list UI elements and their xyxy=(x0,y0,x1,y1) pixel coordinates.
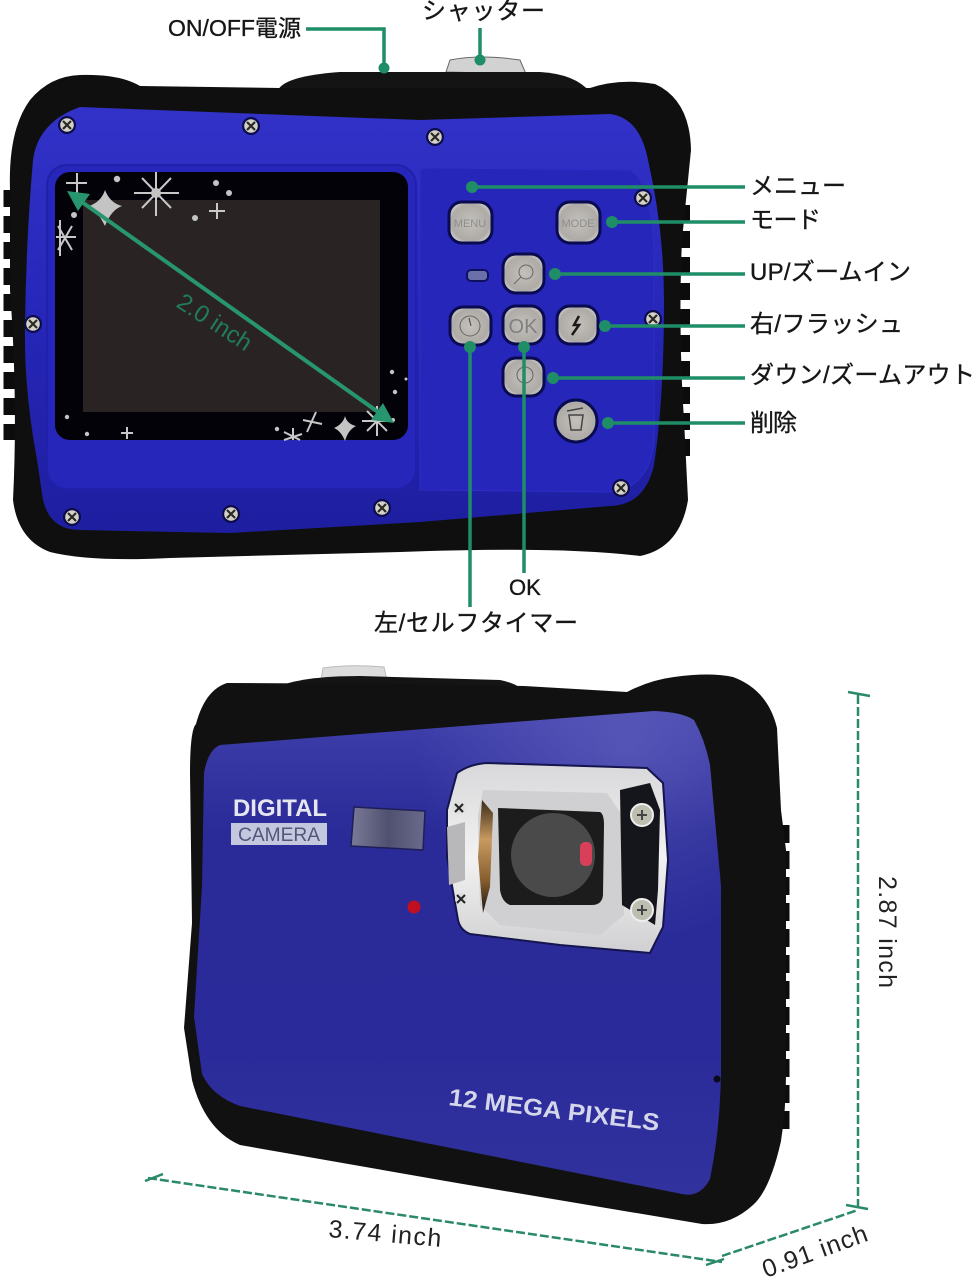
callout: shutter xyxy=(474,28,486,66)
button: mode xyxy=(557,202,600,243)
side port xyxy=(714,1076,720,1082)
indicator light xyxy=(467,270,488,281)
grip ridges xyxy=(4,190,16,440)
control panel inset xyxy=(420,168,654,492)
gold reflection xyxy=(478,800,493,913)
top hump xyxy=(275,676,526,694)
body xyxy=(10,75,691,559)
callout: menu xyxy=(466,181,745,193)
body xyxy=(184,674,786,1224)
label: delete: 削除 xyxy=(750,410,797,437)
callout: up xyxy=(549,268,745,280)
digital camera logo: CAMERA xyxy=(238,825,320,846)
label: left self timer: 左/セルフタイマー xyxy=(374,610,578,637)
dimension: width xyxy=(145,1174,724,1265)
lens reflection xyxy=(580,842,592,866)
screen surround xyxy=(47,165,416,489)
digital camera logo: DIGITAL xyxy=(233,795,327,822)
buttons xyxy=(449,202,600,442)
screen xyxy=(55,172,408,440)
lens window xyxy=(498,808,604,905)
camera: front view xyxy=(10,57,691,559)
housing screws xyxy=(631,804,653,826)
top hump xyxy=(278,72,590,92)
button: ok xyxy=(503,306,544,344)
callout: down xyxy=(547,372,745,384)
button: menu: MENU xyxy=(454,218,486,230)
callout: ok xyxy=(518,341,530,573)
blue body xyxy=(194,711,721,1195)
dimension: width: 3.74 inch xyxy=(327,1215,442,1253)
label: menu: メニュー xyxy=(750,173,846,200)
callout: delete xyxy=(602,417,745,429)
12 mega pixels text: 12 MEGA PIXELS xyxy=(447,1084,661,1137)
button: mode: MODE xyxy=(562,218,594,230)
left tab xyxy=(447,822,465,885)
right ridges xyxy=(782,825,790,1130)
label: mode: モード xyxy=(750,207,821,234)
button: ok: OK xyxy=(509,316,538,338)
size arrow: 2.0 inch screen xyxy=(67,191,394,423)
button: down xyxy=(503,358,544,396)
screen display xyxy=(83,200,380,412)
digital camera logo xyxy=(231,795,327,846)
button: up xyxy=(503,254,544,293)
dimension: depth xyxy=(722,1210,871,1280)
flash window xyxy=(351,807,425,850)
label: on/off power: ON/OFF電源 xyxy=(168,15,301,41)
button: menu xyxy=(449,202,492,243)
blue highlight xyxy=(194,711,721,1195)
blue faceplate xyxy=(25,107,664,533)
button: delete xyxy=(555,400,597,442)
red light xyxy=(408,900,420,914)
callout: left xyxy=(464,341,476,607)
shutter button xyxy=(446,57,526,74)
label: down zoom out: ダウン/ズームアウト xyxy=(750,362,975,389)
callout: ON/OFF xyxy=(306,29,390,74)
button: flash xyxy=(557,306,598,344)
stars xyxy=(56,172,408,441)
screws xyxy=(24,116,662,526)
size arrow: 2.0 inch screen: 2.0 inch xyxy=(172,288,257,357)
dimension: height: 2.87 inch xyxy=(873,876,901,988)
label: ok: OK xyxy=(509,575,541,600)
label: right flash: 右/フラッシュ xyxy=(750,311,903,338)
callout: mode xyxy=(606,216,745,228)
lens xyxy=(511,813,595,897)
right grip ridges xyxy=(678,205,690,460)
callout lines xyxy=(306,28,745,607)
lens housing xyxy=(447,763,668,953)
button: self timer xyxy=(450,307,491,345)
camera: angled front view xyxy=(184,666,786,1224)
callout: right xyxy=(599,320,745,332)
label: up zoom in: UP/ズームイン xyxy=(750,259,911,286)
dimension: height xyxy=(846,692,901,1209)
shutter top xyxy=(320,666,388,686)
inner bevel xyxy=(478,790,624,935)
